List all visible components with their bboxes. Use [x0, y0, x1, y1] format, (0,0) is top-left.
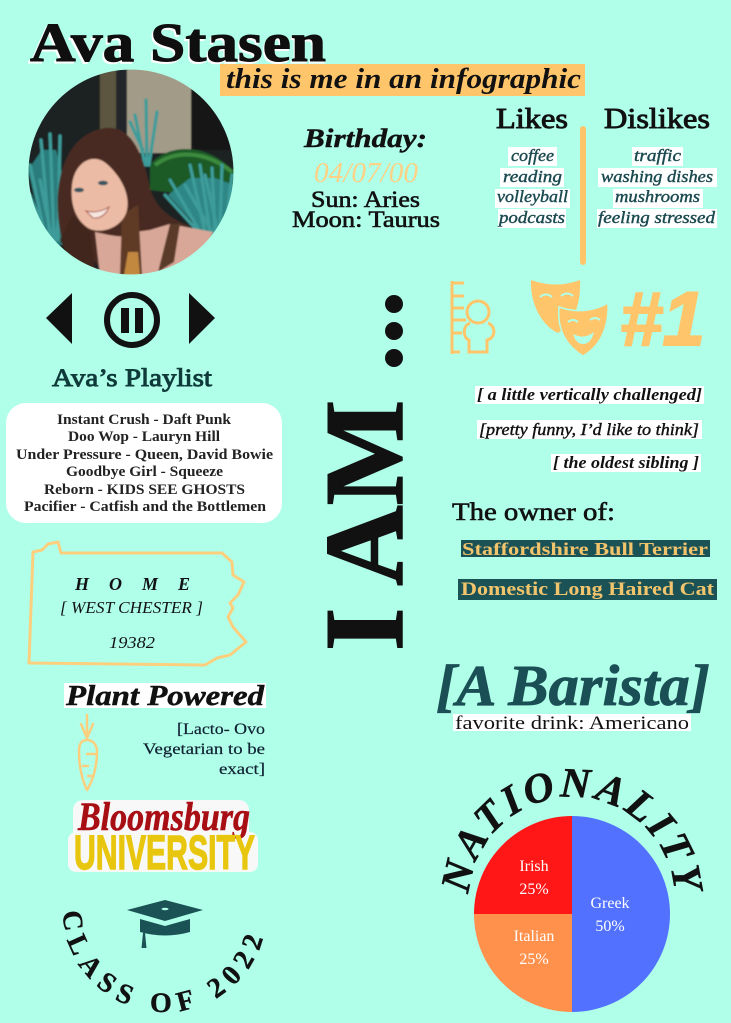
number one: #1	[620, 277, 705, 362]
icon: height ruler and person	[452, 281, 494, 354]
Bloomsburg University sticker	[68, 794, 258, 880]
portrait photo	[28, 69, 235, 275]
pie chart: nationality: 25%	[519, 951, 549, 968]
birthday block: Sun: Aries	[311, 187, 420, 212]
playlist panel: Doo Wop - Lauryn Hill	[68, 429, 220, 445]
music player controls	[46, 293, 215, 345]
playlist panel: Instant Crush - Daft Punk	[57, 412, 232, 428]
likes list: Likes	[496, 104, 568, 135]
likes list	[495, 104, 570, 228]
barista heading: [A Barista]	[436, 653, 710, 718]
playlist panel: Pacifier - Catfish and the Bottlemen	[24, 499, 267, 515]
playlist heading: Ava’s Playlist	[52, 365, 212, 392]
dislikes list	[597, 104, 717, 228]
owner heading: The owner of:	[452, 499, 615, 526]
diet note: Vegetarian to be	[143, 741, 265, 758]
birthday block: Moon: Taurus	[292, 207, 440, 232]
title: Ava Stasen	[28, 14, 325, 75]
icon: graduation cap	[127, 900, 203, 948]
diet note	[143, 721, 265, 778]
playlist panel	[6, 403, 282, 523]
playlist panel: Goodbye Girl - Squeeze	[66, 464, 223, 480]
plant powered heading: Plant Powered	[65, 681, 265, 712]
playlist panel: Under Pressure - Queen, David Bowie	[16, 447, 273, 463]
divider bar	[580, 126, 586, 265]
diet note: exact]	[219, 761, 265, 778]
pie chart: nationality: Greek	[590, 895, 630, 912]
pet: cat label: Domestic Long Haired Cat	[461, 579, 715, 600]
birthday block: 04/07/00	[314, 158, 418, 189]
pie chart: nationality: 50%	[595, 918, 625, 935]
favorite drink: favorite drink: Americano	[455, 713, 689, 734]
title: Ava Stasen	[30, 12, 326, 73]
dislikes list: washing dishes	[601, 167, 713, 186]
sibling caption: [ the oldest sibling ]	[553, 453, 699, 472]
pie chart: nationality	[474, 816, 670, 1012]
dislikes list: Dislikes	[604, 104, 710, 135]
subtitle banner: this is me in an infographic	[226, 64, 582, 95]
icon: theatre masks	[531, 280, 608, 356]
pet: dog label: Staffordshire Bull Terrier	[462, 539, 708, 559]
humor caption: [pretty funny, I’d like to think]	[479, 420, 699, 439]
likes list: podcasts	[498, 208, 565, 227]
playlist panel: Reborn - KIDS SEE GHOSTS	[44, 482, 245, 498]
likes list: coffee	[511, 146, 554, 165]
likes list: reading	[503, 167, 562, 186]
icon: carrot	[79, 715, 97, 790]
pie chart: nationality: Irish	[519, 858, 549, 875]
birthday block: Birthday:	[303, 124, 427, 153]
home state outline: 19382	[109, 633, 156, 652]
pie chart: nationality: Italian	[514, 928, 554, 945]
home state outline: H O M E	[74, 574, 190, 594]
height caption: [ a little vertically challenged]	[477, 385, 702, 404]
dislikes list: traffic	[634, 146, 682, 165]
vertical heading: I AM: I AM	[303, 400, 427, 651]
diet note: [Lacto- Ovo	[177, 721, 265, 738]
home state outline: [ WEST CHESTER ]	[60, 598, 203, 617]
Bloomsburg University sticker: Bloomsburg	[77, 794, 250, 839]
birthday block	[292, 124, 440, 232]
Bloomsburg University sticker: UNIVERSITY	[74, 827, 255, 880]
dislikes list: mushrooms	[615, 187, 700, 206]
nationality curved heading: NATIONALITY	[442, 768, 704, 895]
likes list: volleyball	[497, 187, 568, 206]
dislikes list: feeling stressed	[598, 208, 716, 227]
ellipsis dots	[385, 295, 403, 367]
pie chart: nationality: 25%	[519, 881, 549, 898]
home state outline	[29, 542, 246, 665]
class of 2022 curved text: CLASS OF 2022	[63, 912, 263, 1012]
